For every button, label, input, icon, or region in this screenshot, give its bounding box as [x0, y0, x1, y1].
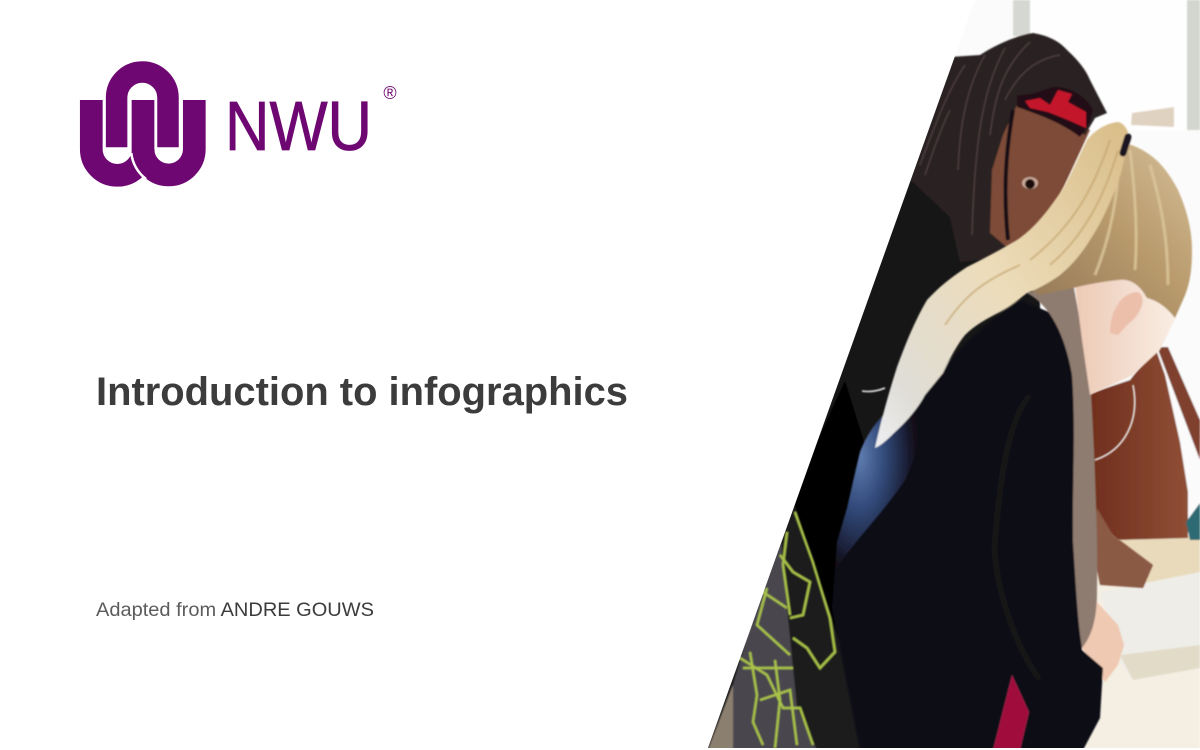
window frames — [1013, 0, 1200, 130]
knit neck scarf — [1027, 283, 1097, 648]
red headband — [1017, 87, 1093, 137]
blonde student — [832, 122, 1192, 750]
skin arm and hand — [1082, 508, 1153, 682]
front braid — [1006, 110, 1013, 240]
face — [985, 100, 1090, 250]
title: Introduction to infographics — [96, 370, 628, 414]
jacket — [764, 180, 1042, 642]
attribution: Adapted from ANDRE GOUWS — [96, 599, 374, 621]
handbag — [1085, 347, 1188, 540]
green patterned scarf — [708, 506, 838, 748]
hair tie — [1123, 137, 1128, 153]
head hair — [1020, 143, 1192, 318]
photo background — [1012, 0, 1200, 748]
black cardigan — [832, 300, 1103, 750]
table — [1084, 574, 1200, 748]
logo mark — [91, 72, 194, 179]
book — [1121, 572, 1200, 680]
wispy hair — [862, 385, 1135, 460]
sleeve shading — [995, 395, 1040, 680]
face and neck — [1074, 280, 1176, 396]
hair streaks — [1095, 150, 1168, 285]
ear — [1110, 292, 1143, 335]
ponytail — [875, 122, 1128, 448]
registered mark: ® — [383, 83, 397, 103]
logo: NWU — [91, 72, 397, 179]
hair braids — [920, 42, 1060, 235]
eye — [1022, 177, 1038, 189]
red shirt — [993, 675, 1029, 750]
logo wordmark: NWU — [225, 87, 372, 165]
dark hair — [900, 33, 1107, 262]
ponytail streaks — [945, 140, 1118, 325]
photo: two students reading — [700, 0, 1200, 750]
bag strap — [1157, 347, 1200, 460]
cardigan light on the back — [834, 415, 917, 569]
dark-haired student — [764, 32, 1108, 642]
shelf item — [1131, 107, 1174, 127]
teal pouch — [1186, 503, 1200, 540]
